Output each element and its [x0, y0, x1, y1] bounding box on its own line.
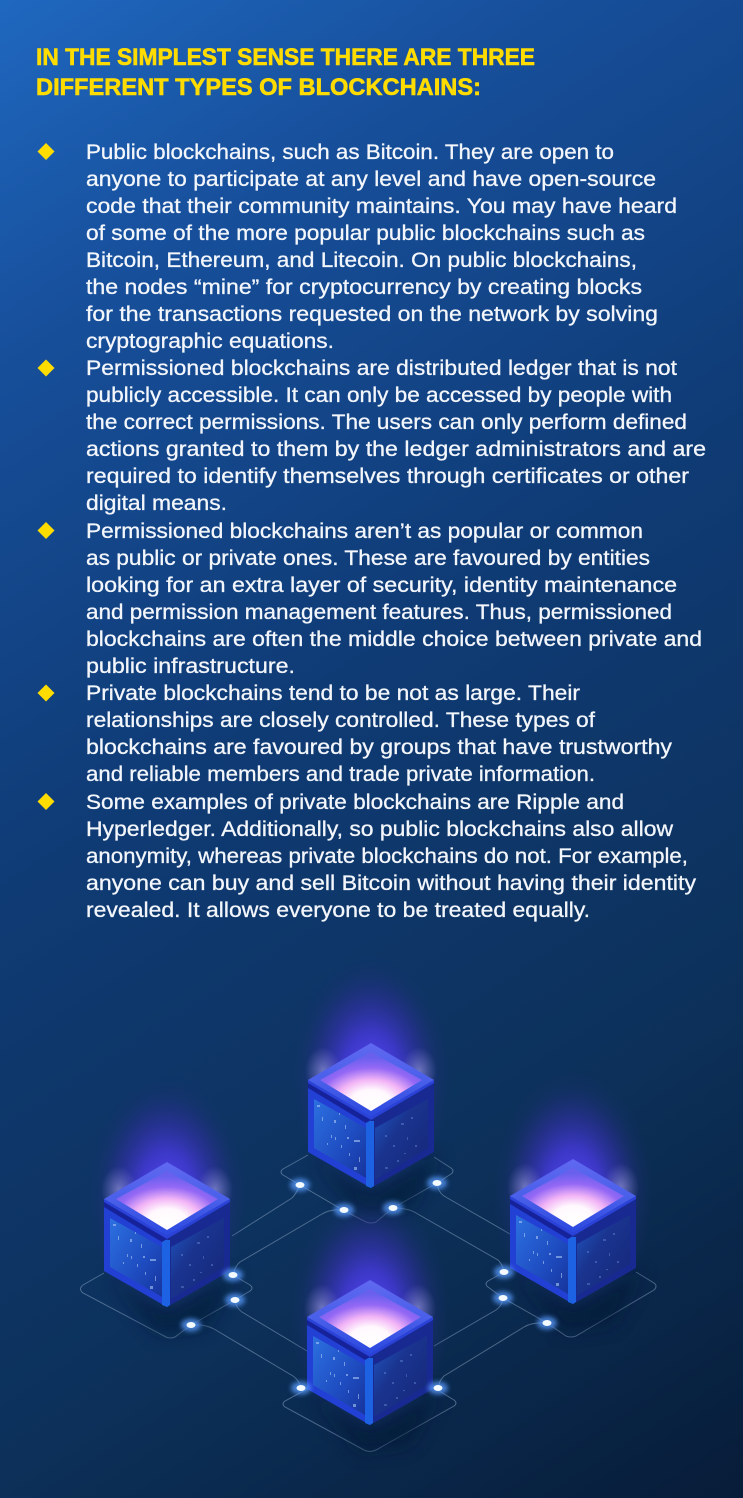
title: [36, 44, 535, 101]
text block: private blockchain examples: anonymity, whereas private blockchains do not. For example,: [86, 845, 688, 868]
text block: public blockchains: Public blockchains, such as Bitcoin. They are open to: [86, 141, 614, 164]
text block: permissioned blockchains usage: as public or private ones. These are favoured by entities: [86, 547, 650, 570]
text block: permissioned blockchains definition: publicly accessible. It can only be accessed by people with: [86, 384, 672, 407]
text block: public blockchains: of some of the more popular public blockchains such as: [86, 222, 645, 245]
text block: permissioned blockchains usage: [86, 520, 702, 678]
icon: bullet diamond 4: [38, 684, 54, 702]
icon: bullet diamond 3: [38, 522, 54, 539]
icon: bottom cube: [290, 1193, 450, 1452]
text block: permissioned blockchains definition: the correct permissions. The users can only perform defined: [86, 411, 687, 434]
icon: right cube: [493, 1072, 653, 1331]
text block: public blockchains: anyone to participate at any level and have open-source: [86, 168, 656, 191]
text block: permissioned blockchains definition: [86, 357, 706, 515]
icon: bullet diamond 5: [38, 793, 54, 810]
text block: private blockchain examples: anyone can buy and sell Bitcoin without having their identity: [86, 872, 697, 895]
text block: permissioned blockchains usage: and permission management features. Thus, permissioned: [86, 601, 672, 624]
text block: private blockchains: relationships are closely controlled. These types of: [86, 709, 595, 732]
text block: permissioned blockchains usage: Permissioned blockchains aren’t as popular or common: [86, 520, 643, 543]
text block: permissioned blockchains usage: blockchains are often the middle choice between private and: [86, 628, 702, 651]
text block: permissioned blockchains usage: public infrastructure.: [86, 655, 295, 678]
text block: public blockchains: for the transactions requested on the network by solving: [86, 303, 658, 326]
text block: permissioned blockchains definition: digital means.: [86, 492, 227, 515]
text block: private blockchain examples: [86, 791, 697, 922]
text block: private blockchain examples: revealed. It allows everyone to be treated equally.: [86, 899, 590, 922]
text block: permissioned blockchains definition: required to identify themselves through certificates or other: [86, 465, 689, 488]
text block: public blockchains: code that their community maintains. You may have heard: [86, 195, 677, 218]
text block: private blockchains: blockchains are favoured by groups that have trustworthy: [86, 736, 673, 759]
icon: left cube: [87, 1075, 247, 1334]
title: DIFFERENT TYPES OF BLOCKCHAINS:: [36, 74, 481, 101]
text block: public blockchains: [86, 141, 677, 353]
text block: public blockchains: Bitcoin, Ethereum, and Litecoin. On public blockchains,: [86, 249, 637, 272]
illustration: blockchain network: [80, 956, 656, 1452]
text block: permissioned blockchains definition: Permissioned blockchains are distributed ledger that is not: [86, 357, 677, 380]
glowing nodes: [181, 1176, 557, 1394]
title: IN THE SIMPLEST SENSE THERE ARE THREE: [36, 44, 535, 71]
text block: private blockchains: [86, 682, 673, 786]
icon: bullet diamond 2: [38, 360, 54, 376]
text block: private blockchains: and reliable members and trade private information.: [86, 763, 595, 786]
icon: top cube: [291, 956, 451, 1215]
text block: private blockchain examples: Some examples of private blockchains are Ripple and: [86, 791, 624, 814]
text block: private blockchain examples: Hyperledger. Additionally, so public blockchains also allow: [86, 818, 674, 841]
network connection lines: [80, 1155, 656, 1452]
text block: public blockchains: the nodes “mine” for cryptocurrency by creating blocks: [86, 276, 642, 299]
text block: public blockchains: cryptographic equations.: [86, 330, 334, 353]
text block: permissioned blockchains definition: actions granted to them by the ledger administrators and are: [86, 438, 706, 461]
icon: bullet diamond 1: [38, 143, 54, 160]
text block: permissioned blockchains usage: looking for an extra layer of security, identity maintenance: [86, 574, 677, 597]
text block: private blockchains: Private blockchains tend to be not as large. Their: [86, 682, 580, 705]
